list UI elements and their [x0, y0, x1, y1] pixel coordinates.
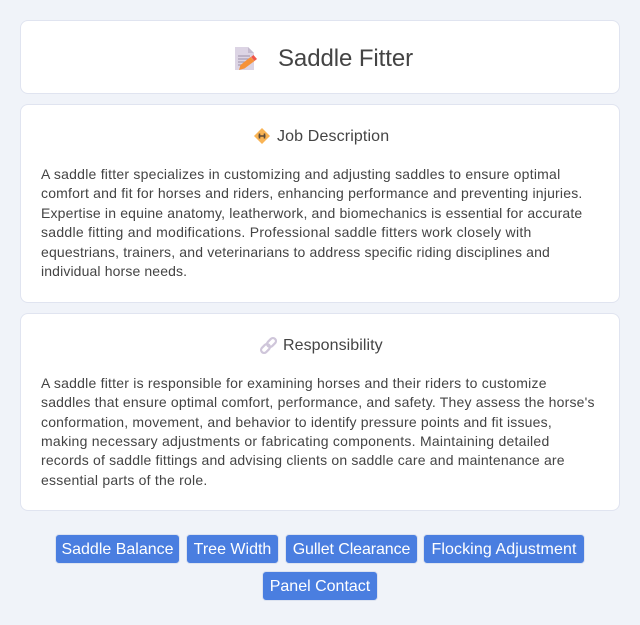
icon: road sign [254, 128, 270, 144]
tag: flocking adjustment: Flocking Adjustment [431, 541, 577, 558]
panel: title card [20, 20, 620, 94]
text block: job description: comfort and fit for horses and riders, enhancing performance and preventing injuries. [41, 185, 583, 201]
text block: job description: saddle fitting and modifications. Professional saddle fitters work closely with [41, 224, 532, 240]
tag: saddle balance: Saddle Balance [61, 541, 174, 558]
text block: job description: A saddle fitter specializes in customizing and adjusting saddles to ensure optimal [41, 166, 560, 182]
tag: tree width: Tree Width [194, 541, 271, 558]
text block: job description: Expertise in equine anatomy, leatherwork, and biomechanics is essential for accurate [41, 205, 582, 221]
tag: panel contact: Panel Contact [270, 578, 370, 595]
tag: saddle balance [55, 534, 180, 564]
text block: job description [41, 166, 583, 279]
text block: responsibility: essential parts of the role. [41, 472, 207, 488]
text block: responsibility: saddles that ensure optimal comfort, performance, and safety. They assess the horse's [41, 394, 595, 410]
text block: responsibility: making necessary adjustments or fabricating components. Maintaining detailed [41, 433, 550, 449]
text block: job description: individual horse needs. [41, 263, 187, 279]
text block: responsibility: conformation, movement, and behavior to identify pressure points and fit issues, [41, 414, 552, 430]
text block: job description: equestrians, trainers, and veterinarians to address specific riding disciplines and [41, 244, 550, 260]
icon: memo with pencil [235, 47, 257, 70]
tag: panel contact [262, 571, 378, 601]
text block: responsibility [41, 375, 595, 488]
tag: gullet clearance: Gullet Clearance [293, 541, 410, 558]
text block: responsibility: A saddle fitter is responsible for examining horses and their riders to customize [41, 375, 547, 391]
panel: responsibility [20, 313, 620, 511]
tag: gullet clearance [285, 534, 418, 564]
text block: responsibility: records of saddle fittings and advising clients on saddle care and maintenance are [41, 452, 565, 468]
title: Saddle Fitter [278, 45, 413, 72]
heading: responsibility: Responsibility [283, 337, 383, 354]
tag: flocking adjustment [423, 534, 585, 564]
icon: link [260, 337, 277, 354]
heading: job description: Job Description [277, 128, 389, 145]
tag: tree width [186, 534, 279, 564]
panel: job description [20, 104, 620, 303]
